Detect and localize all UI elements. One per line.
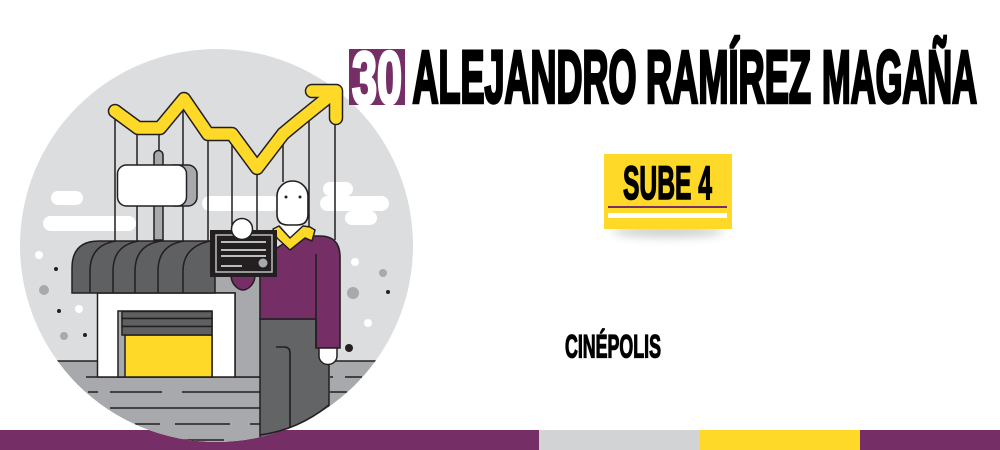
upper hand [232,218,252,240]
bottom colour bar [0,430,1000,450]
badge shadow [612,225,724,237]
clouds [43,182,389,231]
illustration: business owner puppet with storefront [20,49,413,442]
lower hand [231,275,255,290]
rank number badge [349,36,405,120]
store back wall [207,240,262,377]
ground [57,360,376,442]
head [277,181,308,225]
neck [280,224,303,238]
puppet strings [115,100,335,241]
person [210,181,340,444]
title: ALEJANDRO [412,36,636,118]
rising yellow line with arrow [115,91,336,168]
right hand [319,348,337,364]
title: RAMÍREZ [646,36,811,118]
rank change badge [604,154,732,237]
company name: CINÉPOLIS [565,328,661,364]
torso and arm [260,236,340,348]
decorative dots [35,251,390,352]
collar [273,226,315,250]
rank change badge: SUBE 4 [623,156,712,209]
sign post [118,132,197,240]
storefront building [98,293,235,377]
rank number badge: 30 [352,36,402,120]
certificate [210,230,277,277]
trousers [260,319,329,444]
rolling door [118,311,212,377]
background circle [20,49,413,442]
awning [72,241,215,293]
